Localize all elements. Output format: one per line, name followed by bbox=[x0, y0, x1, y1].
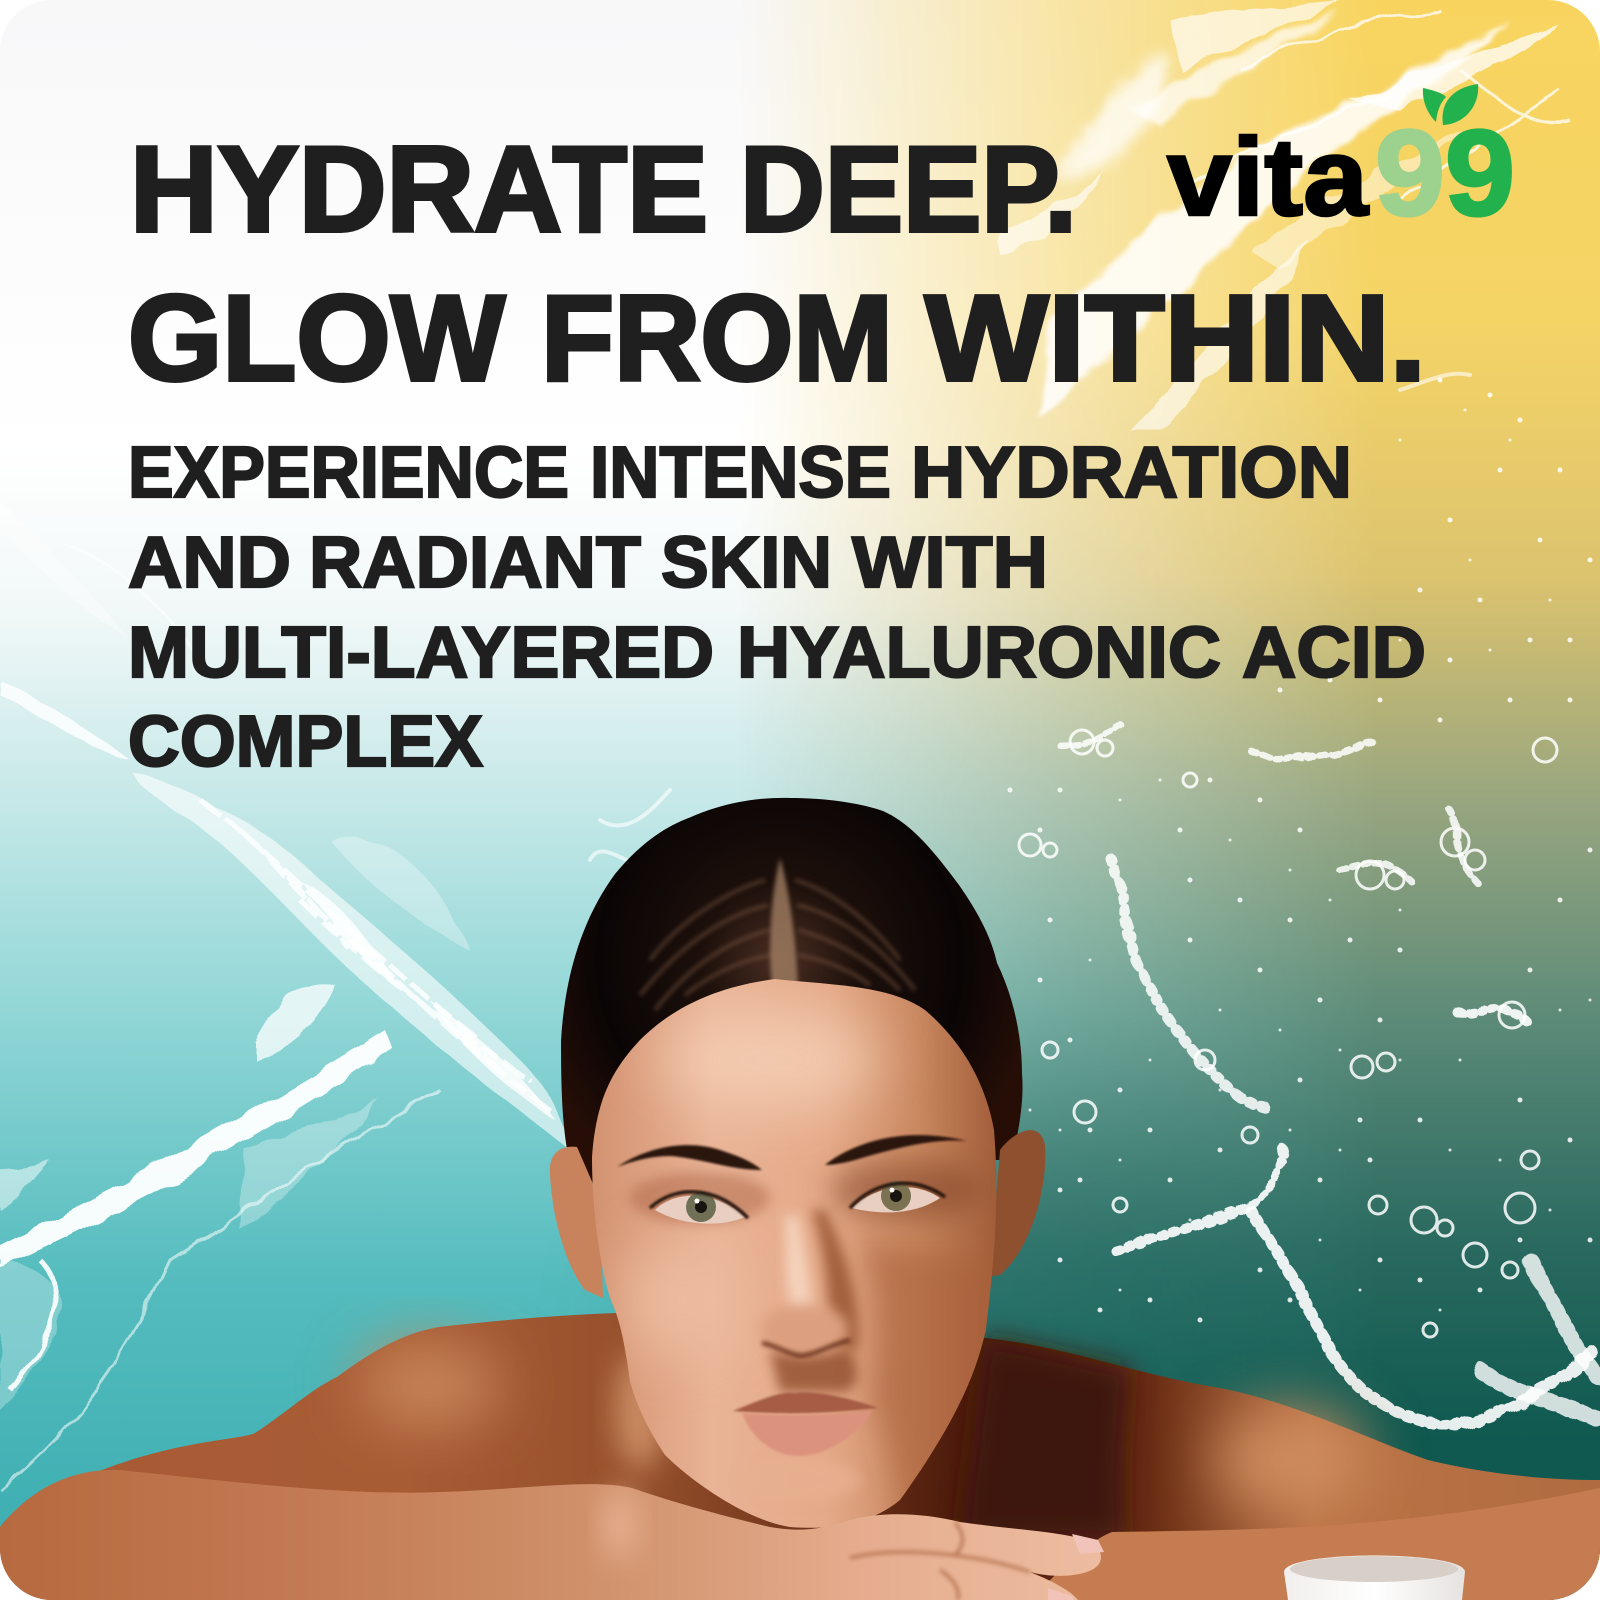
left eyebrow bbox=[617, 1145, 762, 1170]
face bbox=[580, 970, 1010, 1540]
lower lip bbox=[742, 1410, 872, 1456]
hair strands bbox=[640, 880, 915, 1010]
right eye bbox=[850, 1181, 945, 1212]
heading line two: WITHIN. bbox=[925, 270, 1426, 406]
finger nails bbox=[1048, 1534, 1104, 1600]
shoulder highlights bbox=[360, 1338, 1365, 1540]
eye socket shadows bbox=[630, 1172, 770, 1224]
subheading line three bbox=[128, 613, 1426, 693]
woman portrait bbox=[0, 798, 1600, 1600]
finger lines bbox=[850, 1522, 1030, 1600]
right ear bbox=[992, 1130, 1046, 1276]
heading line two: GLOW bbox=[128, 270, 506, 406]
subheading line two: RADIANT bbox=[309, 523, 641, 603]
logo leaves bbox=[1423, 84, 1478, 125]
nose tip bbox=[760, 1304, 848, 1356]
subheading line one: HYDRATION bbox=[911, 433, 1352, 513]
subheading bbox=[128, 433, 1426, 782]
heading line two: FROM bbox=[541, 270, 893, 406]
subheading line two: SKIN bbox=[661, 523, 832, 603]
subheading line three: ACID bbox=[1242, 613, 1426, 693]
water splash: left side bbox=[0, 622, 567, 1492]
right eyebrow bbox=[825, 1135, 967, 1165]
logo wordmark vita: vita bbox=[1167, 116, 1369, 239]
heading line one: HYDRATE bbox=[130, 121, 708, 257]
hair parting bbox=[770, 858, 798, 985]
under nose shadow bbox=[770, 1350, 857, 1392]
nose side shadow bbox=[812, 1210, 859, 1350]
shoulders bbox=[0, 1313, 1600, 1600]
logo digit light nine: 9 bbox=[1375, 105, 1445, 241]
product jar bbox=[1284, 1556, 1465, 1600]
hair bbox=[561, 798, 1023, 1190]
subheading line one bbox=[128, 433, 1352, 513]
left arm and hand bbox=[0, 1470, 1101, 1600]
heading line two bbox=[128, 270, 1426, 406]
nostrils bbox=[762, 1340, 850, 1356]
water splash: top right streaks bbox=[1000, 0, 1570, 430]
water droplets scatter bbox=[590, 374, 1590, 1320]
subheading line two: AND bbox=[128, 523, 291, 603]
subheading line two bbox=[128, 523, 1048, 603]
subheading line three: HYALURONIC bbox=[737, 613, 1221, 693]
logo digit dark nine: 9 bbox=[1445, 105, 1515, 241]
subheading line four: COMPLEX bbox=[128, 702, 483, 782]
forehead highlight bbox=[660, 1010, 880, 1110]
right arm bbox=[1030, 1488, 1600, 1600]
right face shadow bbox=[856, 1234, 992, 1508]
left cheek highlight bbox=[620, 1240, 740, 1360]
heading line one: DEEP. bbox=[740, 121, 1077, 257]
chin highlight bbox=[740, 1458, 860, 1502]
water droplets chains bbox=[1060, 725, 1600, 1425]
subheading line one: EXPERIENCE bbox=[128, 433, 569, 513]
left eye bbox=[650, 1192, 748, 1224]
heading bbox=[128, 121, 1426, 406]
upper lip bbox=[733, 1392, 878, 1413]
subheading line two: WITH bbox=[852, 523, 1048, 603]
subheading line three: MULTI-LAYERED bbox=[128, 613, 714, 693]
wrist highlight bbox=[602, 1489, 638, 1561]
water bubbles bbox=[1019, 730, 1557, 1337]
logo: vita99 bbox=[1167, 84, 1515, 241]
heading line one bbox=[130, 121, 1077, 257]
left ear bbox=[550, 1147, 603, 1298]
nose bridge highlight bbox=[785, 1215, 815, 1325]
subheading line one: INTENSE bbox=[590, 433, 891, 513]
